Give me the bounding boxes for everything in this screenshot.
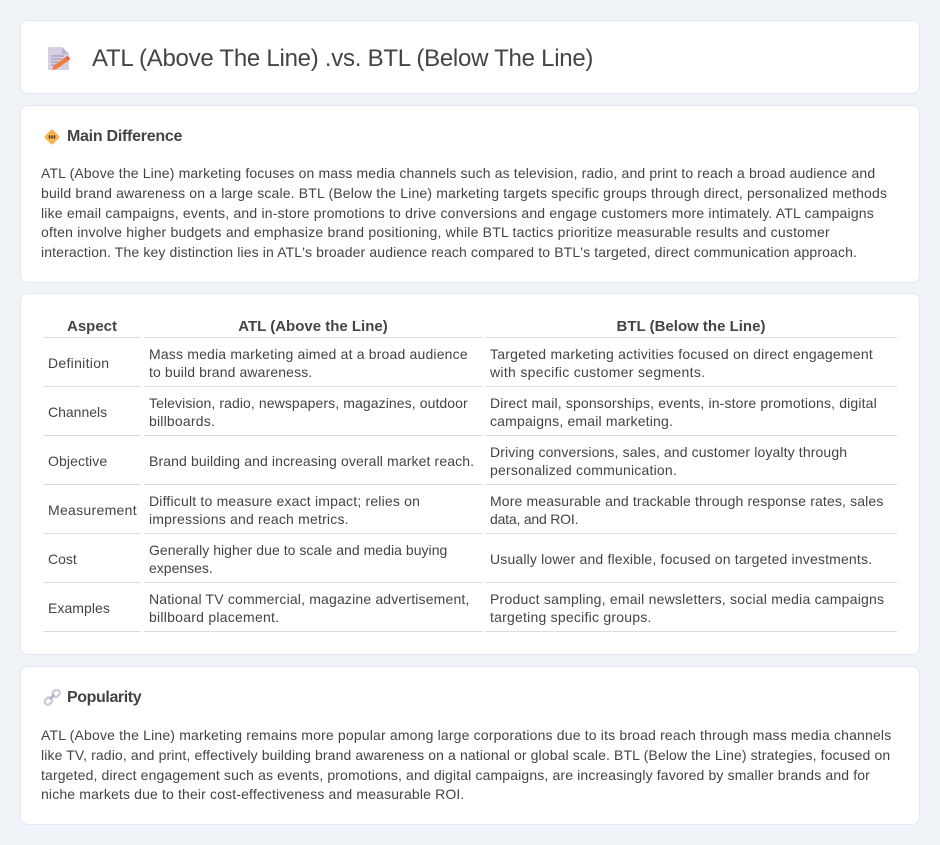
- panel: comparison table: [20, 293, 920, 655]
- row: objective: Brand building and increasing overall market reach.: [149, 453, 474, 469]
- text block: popularity: ATL (Above the Line) marketing remains more popular among large corporations due to its broad reach through mass media channels: [41, 727, 891, 743]
- text block: main difference: often involve higher budgets and emphasize brand positioning, while BTL tactics prioritize measurable results and customer: [41, 224, 830, 240]
- row: measurement: [48, 493, 883, 527]
- table header: ATL: [144, 317, 482, 338]
- row: channels: Channels: [48, 404, 107, 420]
- row: measurement: More measurable and trackable through response rates, sales: [490, 493, 883, 509]
- row: examples: [48, 591, 884, 625]
- text block: popularity: [41, 727, 891, 802]
- row: objective: Driving conversions, sales, and customer loyalty through: [490, 444, 847, 460]
- panel: main difference: [20, 105, 920, 283]
- row: objective: personalized communication.: [490, 462, 677, 478]
- table header: BTL: [485, 317, 897, 338]
- row: definition: with specific customer segments.: [490, 364, 705, 380]
- row: definition: Mass media marketing aimed at a broad audience: [149, 346, 468, 362]
- text block: main difference: interaction. The key distinction lies in ATL's broader audience reach compared to BTL's targeted, direct communication approach.: [41, 244, 857, 260]
- icon: diamond sign: [44, 130, 60, 144]
- table header: BTL: BTL (Below the Line): [617, 318, 765, 335]
- table header: aspect: Aspect: [67, 318, 117, 335]
- row: channels: campaigns, email marketing.: [490, 413, 673, 429]
- text block: main difference: build brand awareness on a large scale. BTL (Below the Line) marketing targets specific groups through direct, personalized methods: [41, 185, 887, 201]
- row: channels: [48, 395, 877, 429]
- heading: popularity: Popularity: [67, 689, 141, 706]
- row: objective: [48, 444, 847, 478]
- row: measurement: impressions and reach metrics.: [149, 511, 349, 527]
- row: definition: Definition: [48, 355, 109, 371]
- text block: main difference: [41, 165, 887, 260]
- panel: popularity: [20, 666, 920, 825]
- row: examples: National TV commercial, magazine advertisement,: [149, 591, 470, 607]
- row: examples: Product sampling, email newsletters, social media campaigns: [490, 591, 884, 607]
- row: measurement: data, and ROI.: [490, 511, 578, 527]
- text block: main difference: like email campaigns, events, and in-store promotions to drive conversions and engage customers more intimately. ATL campaigns: [41, 205, 874, 221]
- row: measurement: Measurement: [48, 502, 137, 518]
- row: definition: Targeted marketing activities focused on direct engagement: [490, 346, 873, 362]
- text block: popularity: niche markets due to their cost-effectiveness and measurable ROI.: [41, 786, 464, 802]
- row: measurement: Difficult to measure exact impact; relies on: [149, 493, 420, 509]
- text block: popularity: like TV, radio, and print, effectively building brand awareness on a national or global scale. BTL (Below the Line) strategies, focused on: [41, 747, 890, 763]
- panel: title card: [20, 20, 920, 94]
- icon: document with pencil: [48, 47, 70, 70]
- table header: ATL: ATL (Above the Line): [238, 318, 388, 335]
- text block: main difference: ATL (Above the Line) marketing focuses on mass media channels such as television, radio, and print to reach a broad audience and: [41, 165, 875, 181]
- title: ATL (Above The Line) .vs. BTL (Below The Line): [92, 45, 593, 72]
- row: definition: to build brand awareness.: [149, 364, 312, 380]
- row: cost: Usually lower and flexible, focused on targeted investments.: [490, 551, 872, 567]
- row: examples: Examples: [48, 600, 110, 616]
- heading: main difference: Main Difference: [67, 128, 182, 145]
- row: cost: Generally higher due to scale and media buying: [149, 542, 447, 558]
- row: channels: billboards.: [149, 413, 215, 429]
- row: channels: Direct mail, sponsorships, events, in-store promotions, digital: [490, 395, 877, 411]
- text block: popularity: targeted, direct engagement such as events, promotions, and digital campaigns, are increasingly favored by smaller brands and for: [41, 767, 870, 783]
- row: channels: Television, radio, newspapers, magazines, outdoor: [149, 395, 468, 411]
- row: cost: [48, 542, 872, 576]
- table header: aspect: [43, 317, 141, 338]
- row: cost: expenses.: [149, 560, 213, 576]
- row: examples: billboard placement.: [149, 609, 279, 625]
- row: definition: [48, 346, 873, 380]
- row: examples: targeting specific groups.: [490, 609, 652, 625]
- icon: chain link: [44, 689, 61, 706]
- row: cost: Cost: [48, 551, 77, 567]
- row: objective: Objective: [48, 453, 107, 469]
